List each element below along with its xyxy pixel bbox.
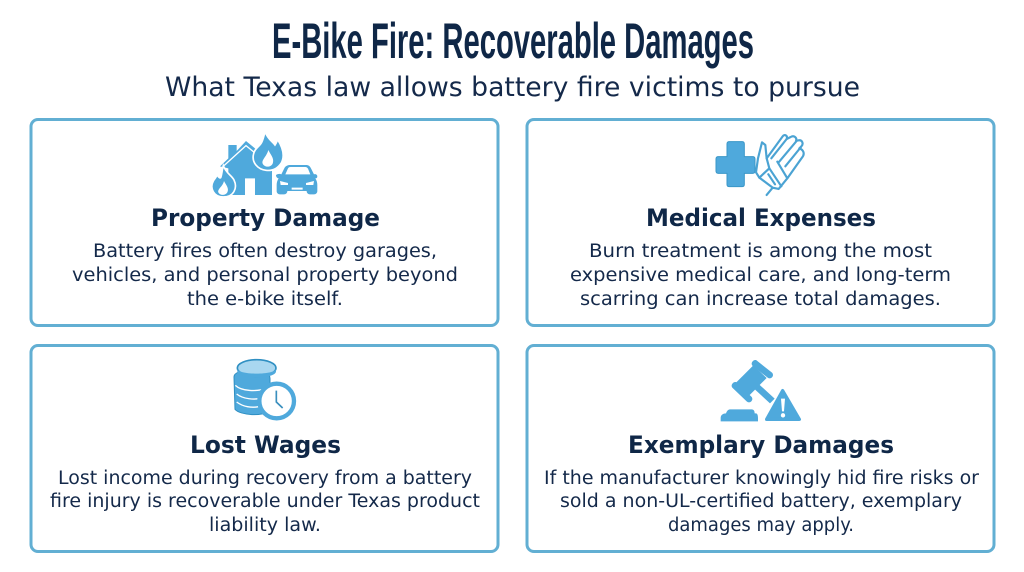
text block: damages may apply. [668,515,854,536]
panel: exemplary damages [527,346,994,552]
text block: Lost income during recovery from a battery [58,468,472,489]
panel: lost wages [31,346,498,552]
text block: Battery fires often destroy garages, [93,241,437,262]
icon: burning house and car [212,132,317,197]
icon: coin stack and clock [234,360,294,418]
subtitle: What Texas law allows battery fire victims to pursue [165,72,860,103]
heading: Property Damage [151,204,380,232]
heading: Medical Expenses [646,204,876,232]
icon: gavel and warning triangle [721,360,799,421]
text block [72,241,458,310]
heading: Lost Wages [190,431,341,459]
text block [544,468,979,536]
text block: Burn treatment is among the most [589,241,932,262]
panel: property damage [31,120,498,326]
text block: vehicles, and personal property beyond [72,265,458,286]
panel: medical expenses [527,120,994,326]
text block [50,468,480,536]
text block: sold a non-UL-certified battery, exemplary [560,491,962,512]
icon: medical cross and bandaged hand [716,135,804,195]
text block: scarring can increase total damages. [580,289,941,310]
text block: fire injury is recoverable under Texas product [50,491,480,512]
text block: If the manufacturer knowingly hid fire risks or [544,468,979,489]
text block: the e-bike itself. [187,289,343,310]
text block: expensive medical care, and long-term [570,265,951,286]
text block: liability law. [209,515,321,536]
heading: Exemplary Damages [628,431,894,459]
text block [570,241,951,310]
